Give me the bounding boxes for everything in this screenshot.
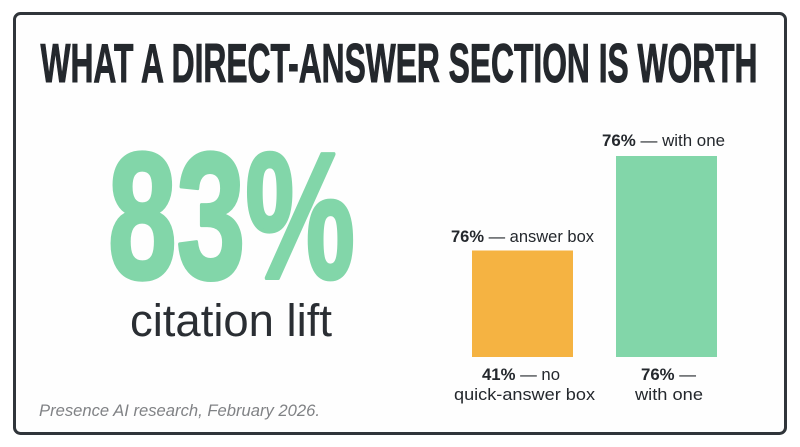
bottom label: with one: with one [634,385,703,404]
bottom label: with one [634,365,703,404]
top label: answer box: 76% — answer box [451,227,594,246]
orange bar [472,250,573,357]
green bar [616,156,717,357]
bar: with one [602,131,725,404]
bar chart: citation rate comparison [451,131,725,404]
bottom label: no quick-answer box: 41% — no [482,365,560,384]
bottom label: with one: 76% — [641,365,696,384]
bottom label: no quick-answer box [454,365,596,404]
bottom label: no quick-answer box: quick-answer box [454,385,596,404]
top label: with one: 76% — with one [602,131,725,150]
big stat: 83% citation lift [108,116,355,346]
stat label: citation lift [130,295,332,346]
source note: Presence AI research, February 2026. [39,401,320,420]
stat value: 83% [108,116,355,317]
bar: no quick-answer box [451,227,596,404]
